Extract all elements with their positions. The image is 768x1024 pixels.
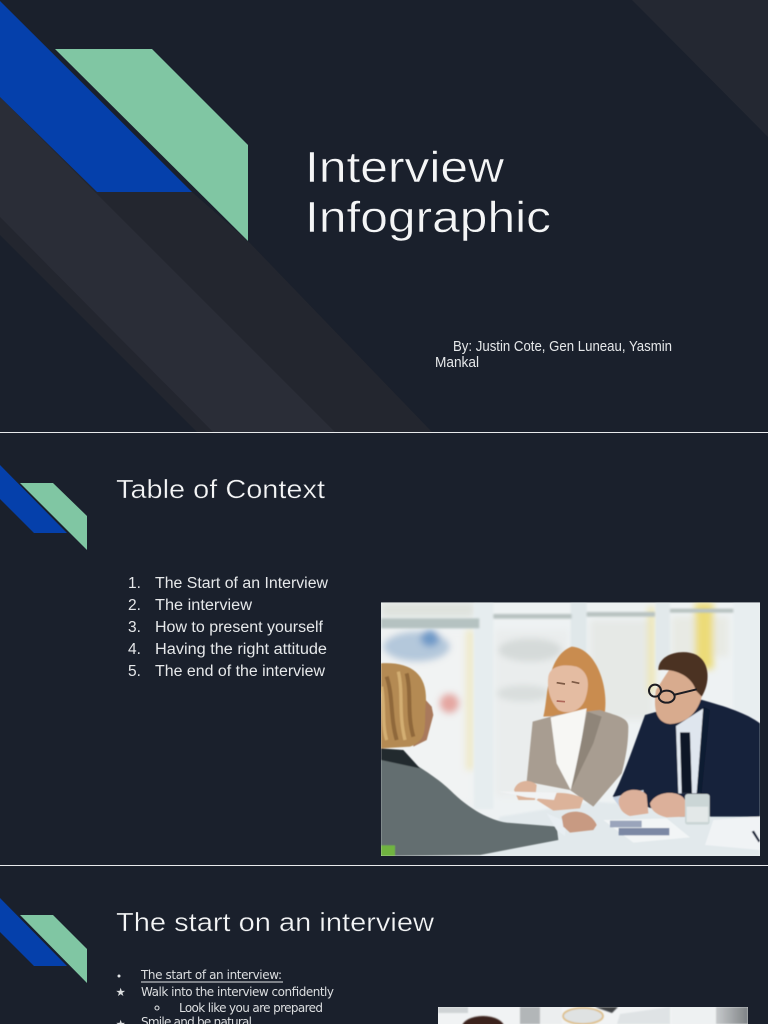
authors text: By: Justin Cote, Gen Luneau, Yasmin xyxy=(453,339,672,355)
authors text: Mankal xyxy=(435,355,479,371)
background diagonal bands xyxy=(0,0,768,432)
handwritten bullet list xyxy=(116,968,334,1024)
numbered list: 4. xyxy=(128,641,141,658)
title: Interview xyxy=(305,143,504,192)
photo: office interior, cropped at page edge xyxy=(438,1007,748,1024)
icon: small ribbon pair xyxy=(0,465,87,550)
handwritten bullet list: The start of an interview: xyxy=(140,968,282,982)
photo: interview at a table xyxy=(381,602,760,856)
handwritten bullet list: Look like you are prepared xyxy=(179,1001,323,1015)
numbered list: 5. xyxy=(128,663,141,680)
panel: table of context slide xyxy=(0,465,760,856)
panel: the start of an interview slide xyxy=(0,898,748,1024)
panel: title slide xyxy=(0,0,768,432)
handwritten bullet list: Walk into the interview confidently xyxy=(141,985,334,999)
table xyxy=(480,802,760,856)
numbered list: 2. xyxy=(128,597,141,614)
numbered list xyxy=(128,575,329,680)
numbered list: 1. xyxy=(128,575,141,592)
interviewer seen from behind xyxy=(381,757,558,856)
man xyxy=(613,699,760,817)
papers xyxy=(603,818,690,843)
handwritten bullet list: ★ xyxy=(116,985,126,999)
numbered list: How to present yourself xyxy=(155,619,324,636)
icon: blue diagonal ribbon xyxy=(0,1,192,192)
heading: The start on an interview xyxy=(116,907,434,937)
glasses and face details xyxy=(557,682,697,703)
numbered list: The Start of an Interview xyxy=(155,575,329,592)
numbered list: The end of the interview xyxy=(155,663,326,680)
icon: small ribbon pair xyxy=(0,898,87,983)
icon: green diagonal ribbon xyxy=(55,49,248,241)
numbered list: Having the right attitude xyxy=(155,641,327,658)
title xyxy=(305,143,551,242)
woman xyxy=(543,647,606,717)
heading: Table of Context xyxy=(116,474,326,504)
authors text xyxy=(435,339,672,371)
numbered list: The interview xyxy=(155,597,253,614)
title: Infographic xyxy=(305,193,551,242)
numbered list: 3. xyxy=(128,619,141,636)
